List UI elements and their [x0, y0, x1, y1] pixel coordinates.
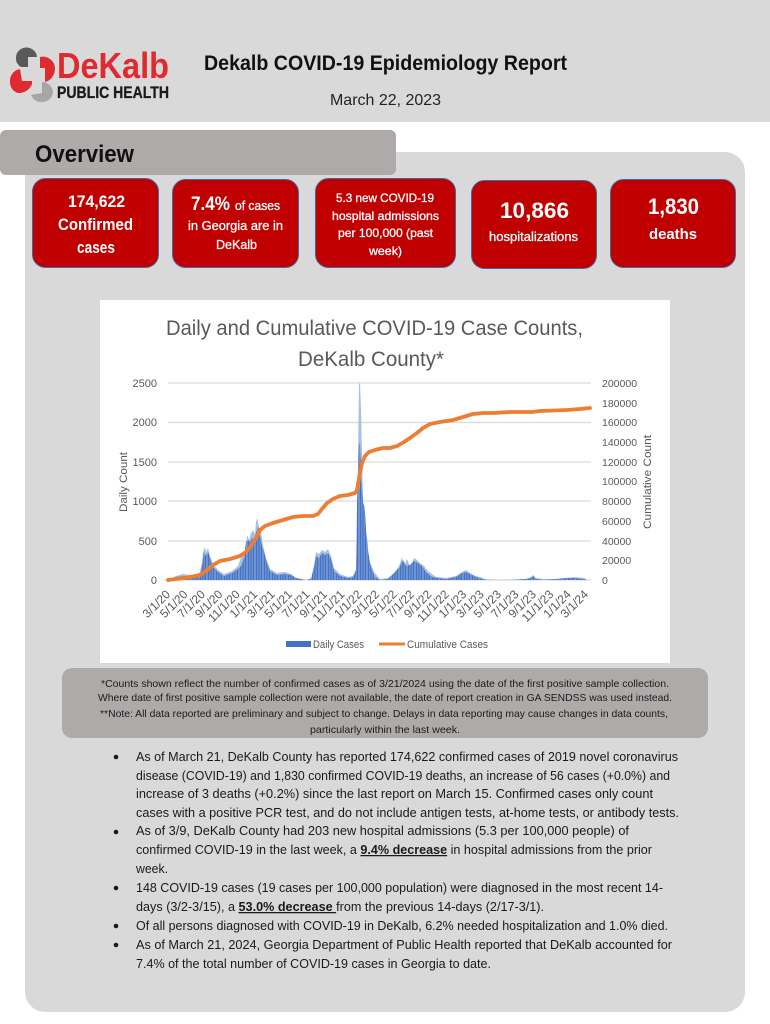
right axis labels: 0 — [602, 575, 608, 587]
left axis labels: 1500 — [133, 457, 157, 469]
report date: March 22, 2023 — [330, 92, 441, 109]
logo: DeKalb Public Health — [10, 45, 169, 102]
x axis date labels: 1/1/21 — [227, 587, 260, 621]
bullet: hospital admissions: As of 3/9, DeKalb County had 203 new hospital admissions (5.3 per 100,000 people) of — [136, 824, 630, 838]
left axis labels: 500 — [139, 536, 157, 548]
x axis date labels: 9/1/23 — [505, 587, 539, 621]
daily cases light spikes — [168, 383, 587, 580]
bullet: recent diagnoses — [114, 881, 663, 914]
bullet: case and death totals: disease (COVID-19) and 1,830 confirmed COVID-19 deaths, an increase of 56 cases (+0.0%) and — [136, 769, 670, 783]
x axis date labels: 5/1/20 — [157, 587, 191, 621]
x axis date labels: 3/1/24 — [558, 587, 591, 621]
x axis date labels: 11/1/23 — [519, 587, 557, 625]
stat card: hospitalizations: 10,866 — [500, 198, 569, 223]
right axis labels: 40000 — [602, 536, 631, 548]
x axis date labels: 1/1/23 — [436, 587, 469, 621]
right axis labels: 20000 — [602, 555, 631, 567]
stat card: share of Georgia cases: of cases — [235, 198, 280, 213]
logo: DeKalb Public Health: DeKalb — [57, 45, 169, 86]
x axis date labels: 11/1/20 — [205, 587, 243, 625]
footnote box: particularly within the last week. — [310, 724, 460, 736]
bullet: hospital admissions — [114, 824, 652, 876]
footnote box — [62, 668, 708, 738]
bullet: case and death totals: cases with a positive PCR test, and do not include antigen tests, at-home tests, or antibody tests. — [136, 806, 679, 820]
x axis date labels: 3/1/22 — [349, 587, 382, 621]
stat card: hospital admissions: per 100,000 (past — [338, 226, 434, 240]
stat card: hospitalizations — [472, 180, 596, 268]
x axis date labels: 7/1/21 — [279, 587, 313, 621]
right axis labels: 160000 — [602, 417, 637, 429]
main gray panel — [25, 152, 745, 1012]
right axis labels: 200000 — [602, 378, 637, 390]
left axis labels: 1000 — [133, 496, 157, 508]
stat card: confirmed cases: 174,622 — [68, 192, 125, 211]
stat card: confirmed cases — [32, 178, 158, 268]
x axis date labels: 11/1/21 — [310, 587, 348, 625]
stat card: deaths: 1,830 — [648, 194, 699, 219]
right axis title: Cumulative Count — [642, 435, 654, 529]
bullet: recent diagnoses: 148 COVID-19 cases (19 cases per 100,000 population) were diagnosed in the most recent 14- — [136, 881, 663, 895]
legend: Cumulative Cases — [407, 639, 488, 651]
left axis labels: 2000 — [133, 417, 157, 429]
bullet: case and death totals: As of March 21, DeKalb County has reported 174,622 confirmed cases of 2019 novel coronavirus — [136, 750, 678, 764]
logo: DeKalb Public Health: PUBLIC HEALTH — [57, 84, 169, 102]
stat card: share of Georgia cases: in Georgia are in — [188, 218, 283, 233]
bullet: share of Georgia cases: As of March 21, 2024, Georgia Department of Public Health reported that DeKalb accounted for — [136, 938, 672, 952]
footnote box: *Counts shown reflect the number of confirmed cases as of 3/21/2024 using the date of the first positive sample collection. — [101, 678, 669, 690]
legend: Daily Cases — [313, 639, 364, 651]
chart title: Daily and Cumulative COVID-19 Case Counts, — [166, 317, 583, 340]
left axis labels — [133, 378, 157, 587]
x axis date labels — [140, 587, 591, 625]
header band — [0, 0, 770, 122]
left axis labels: 2500 — [133, 378, 157, 390]
stat card: deaths — [610, 180, 736, 268]
right axis labels: 180000 — [602, 398, 637, 410]
footnote box: Where date of first positive sample collection were not available, the date of report creation in GA SENDSS was used instead. — [98, 692, 672, 704]
x axis date labels: 9/1/20 — [192, 587, 226, 621]
stat card: confirmed cases: Confirmed — [58, 215, 133, 234]
x axis date labels: 7/1/22 — [384, 587, 417, 621]
right axis labels: 120000 — [602, 457, 637, 469]
right axis labels: 100000 — [602, 476, 637, 488]
stat card: deaths: deaths — [649, 226, 697, 243]
x axis date labels: 11/1/22 — [414, 587, 452, 625]
x axis date labels: 1/1/24 — [540, 587, 574, 621]
bullet: recent diagnoses: days (3/2-3/15), a 53.0% decrease from the previous 14-days (2/17-3/1). — [136, 900, 544, 914]
left axis labels: 0 — [151, 575, 157, 587]
x axis date labels: 3/1/20 — [140, 587, 173, 621]
daily cases bars — [168, 443, 587, 580]
chart title — [166, 317, 583, 371]
x axis date labels: 7/1/20 — [174, 587, 208, 621]
x axis date labels: 3/1/21 — [244, 587, 278, 621]
bullet: case and death totals: increase of 3 deaths (+0.2%) since the last report on March 15. Confirmed cases only count — [136, 787, 654, 801]
stat card: share of Georgia cases: 7.4% — [191, 194, 230, 215]
x axis date labels: 7/1/23 — [488, 587, 522, 621]
cumulative cases line — [168, 408, 590, 580]
footnote box: **Note: All data reported are preliminary and subject to change. Delays in data reporting may cause changes in data counts, — [100, 708, 668, 720]
right axis labels: 80000 — [602, 496, 631, 508]
x axis date labels: 3/1/23 — [453, 587, 487, 621]
title: Dekalb COVID-19 Epidemiology Report — [204, 52, 567, 75]
bullet: share of Georgia cases: 7.4% of the total number of COVID-19 cases in Georgia to date. — [136, 957, 491, 971]
stat card: hospital admissions: 5.3 new COVID-19 — [336, 191, 434, 205]
x axis date labels: 1/1/22 — [331, 587, 365, 621]
right axis labels: 60000 — [602, 516, 631, 528]
x axis date labels: 9/1/21 — [296, 587, 330, 621]
overview heading — [0, 130, 396, 175]
overview heading: Overview — [35, 141, 134, 168]
bullet: severity: Of all persons diagnosed with COVID-19 in DeKalb, 6.2% needed hospitalization and 1.0% died. — [136, 919, 668, 933]
chart panel: daily and cumulative case counts — [100, 300, 670, 663]
bullet: hospital admissions: confirmed COVID-19 in the last week, a 9.4% decrease in hospital admissions from the prior — [136, 843, 652, 857]
x axis date labels: 9/1/22 — [401, 587, 435, 621]
stat card: hospitalizations: hospitalizations — [489, 229, 578, 244]
x axis date labels: 5/1/22 — [366, 587, 400, 621]
stat card: hospital admissions: week) — [368, 244, 402, 258]
x axis date labels: 5/1/21 — [262, 587, 295, 621]
left axis title: Daily Count — [118, 452, 130, 512]
chart title: DeKalb County* — [298, 348, 444, 371]
bullet list — [114, 750, 679, 971]
bullet: case and death totals — [114, 750, 679, 820]
bullet: share of Georgia cases — [114, 938, 672, 971]
bullet: hospital admissions: week. — [135, 862, 168, 876]
right axis labels: 140000 — [602, 437, 637, 449]
stat card: hospital admissions: hospital admissions — [332, 209, 439, 223]
legend — [286, 639, 488, 651]
stat card: share of Georgia cases: DeKalb — [216, 237, 257, 252]
x axis date labels: 5/1/23 — [471, 587, 504, 621]
stat card: share of Georgia cases — [172, 180, 298, 268]
stat card: hospital admissions — [316, 178, 456, 268]
right axis labels — [602, 378, 637, 587]
stat card: confirmed cases: cases — [77, 238, 115, 257]
